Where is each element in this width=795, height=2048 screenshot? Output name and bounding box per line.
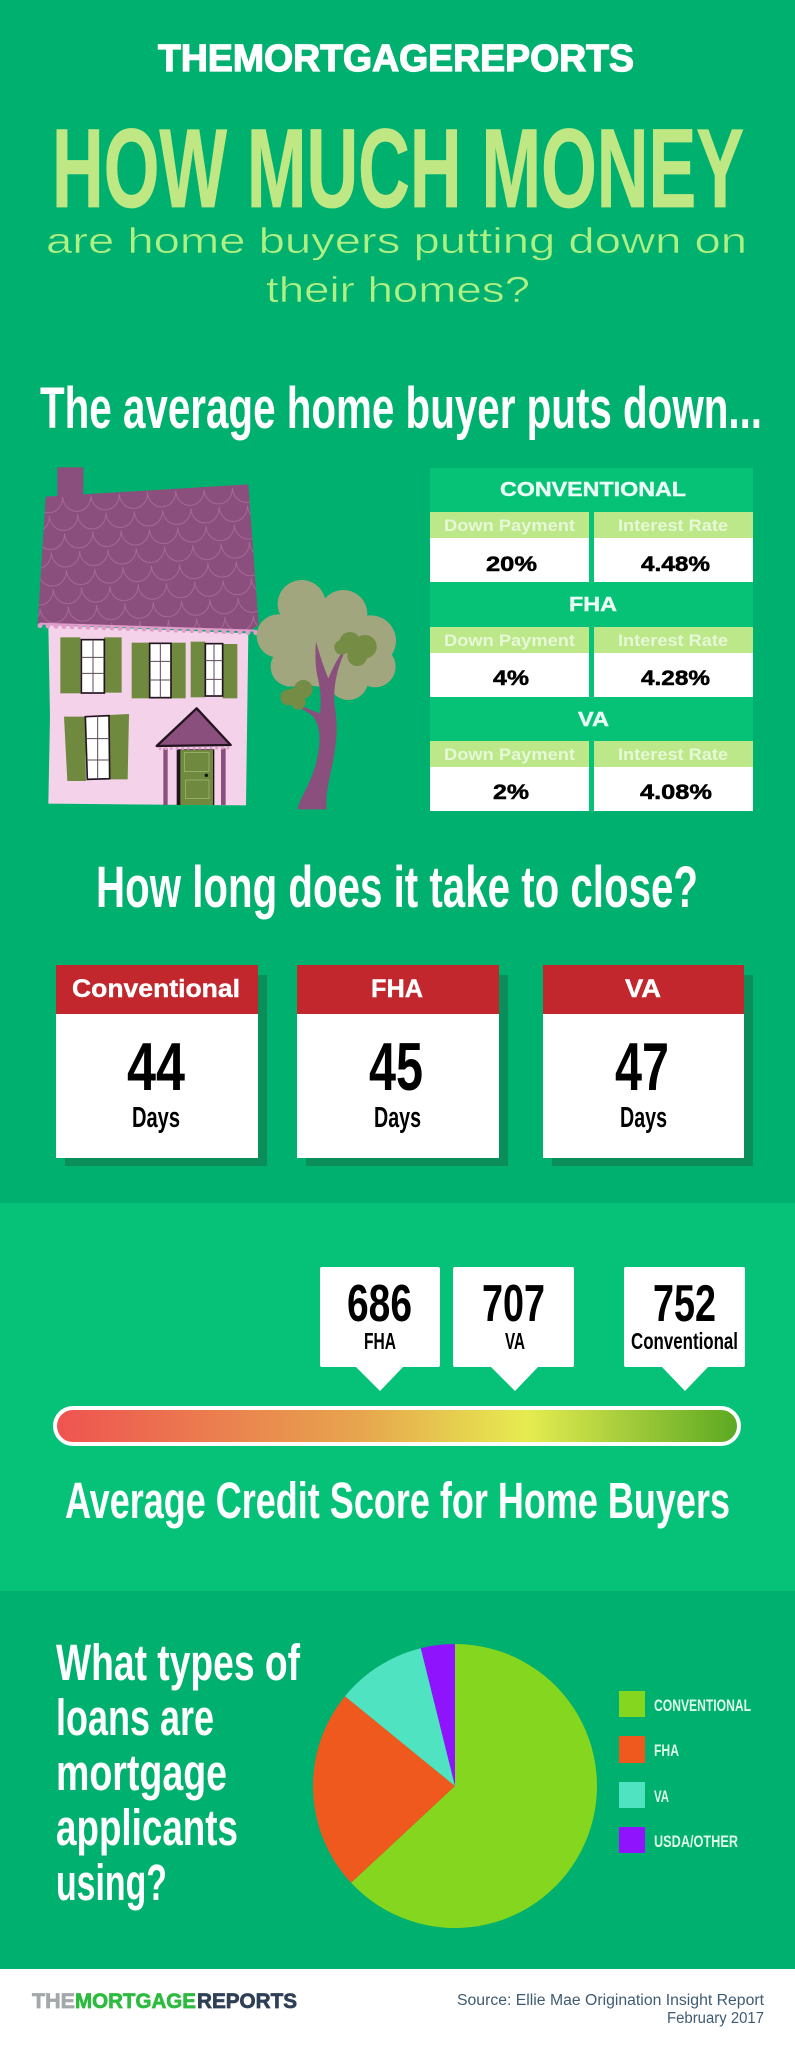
va row: 2% <box>493 781 529 804</box>
callout: fha score: FHA <box>364 1328 396 1354</box>
conventional row: Interest Rate <box>618 517 728 535</box>
heading: loan types <box>56 1634 301 1911</box>
header logo: THEMORTGAGEREPORTS <box>158 38 634 80</box>
legend <box>619 1691 751 1853</box>
callout: conventional score <box>624 1267 745 1391</box>
legend: FHA <box>654 1741 679 1760</box>
va row: 4.08% <box>640 781 712 804</box>
va row <box>430 709 753 811</box>
heading: loan types: mortgage <box>56 1744 227 1801</box>
pie chart: loan types <box>313 1644 597 1928</box>
heading: loan types: loans are <box>56 1689 214 1746</box>
card: va days: 47 <box>615 1029 669 1105</box>
va row: Down Payment <box>444 746 576 764</box>
subtitle: are home buyers putting down on <box>46 220 747 261</box>
callout: fha score: 686 <box>347 1275 412 1333</box>
subtitle: their homes? <box>266 269 530 310</box>
fha row <box>430 594 753 697</box>
card: conventional days: Days <box>132 1102 180 1134</box>
callout: va score: VA <box>505 1328 525 1354</box>
fha row: 4.28% <box>641 667 710 690</box>
fha row: 4% <box>493 667 529 690</box>
callout: va score: 707 <box>482 1275 545 1333</box>
credit score gradient bar <box>55 1408 739 1444</box>
panel: credit score <box>0 1203 795 1591</box>
heading: loan types: applicants <box>56 1799 238 1856</box>
callout: conventional score: 752 <box>653 1275 716 1333</box>
conventional row <box>430 479 753 582</box>
card: fha days: Days <box>374 1102 421 1134</box>
footer logo <box>32 1990 297 2013</box>
conventional row: 4.48% <box>641 553 710 576</box>
illustration: house <box>38 467 259 805</box>
legend: USDA/OTHER <box>654 1832 738 1851</box>
callout: fha score <box>320 1267 440 1391</box>
source note <box>457 1992 765 2027</box>
subtitle <box>46 220 747 310</box>
legend: CONVENTIONAL <box>654 1696 751 1715</box>
card: va days <box>543 965 753 1166</box>
panel: footer <box>0 1969 795 2048</box>
heading: loan types: using? <box>56 1854 167 1911</box>
panel: loan table <box>430 468 753 811</box>
conventional row: 20% <box>486 553 537 576</box>
va row: VA <box>578 709 609 731</box>
conventional row: CONVENTIONAL <box>500 479 686 501</box>
card: conventional days <box>56 965 267 1166</box>
legend: VA <box>654 1787 669 1806</box>
source note: Source: Ellie Mae Origination Insight Report <box>457 1992 765 2009</box>
card: fha days <box>297 965 508 1166</box>
fha row: FHA <box>569 594 617 616</box>
card: conventional days: Conventional <box>72 975 240 1003</box>
footer logo: REPORTS <box>197 1990 297 2013</box>
callout: conventional score: Conventional <box>631 1328 738 1354</box>
card: fha days: FHA <box>371 975 423 1003</box>
conventional row: Down Payment <box>444 517 576 535</box>
footer logo: THE <box>32 1990 75 2013</box>
card: fha days: 45 <box>369 1029 423 1105</box>
card: va days: VA <box>625 975 661 1003</box>
fha row: Down Payment <box>444 632 576 650</box>
card: conventional days: 44 <box>127 1029 185 1105</box>
card: va days: Days <box>620 1102 667 1134</box>
source note: February 2017 <box>667 2010 764 2027</box>
callout: va score <box>453 1267 574 1391</box>
illustration: tree <box>257 580 396 809</box>
heading: loan types: What types of <box>56 1634 301 1691</box>
fha row: Interest Rate <box>618 632 728 650</box>
va row: Interest Rate <box>618 746 728 764</box>
footer logo: MORTGAGE <box>75 1990 196 2013</box>
